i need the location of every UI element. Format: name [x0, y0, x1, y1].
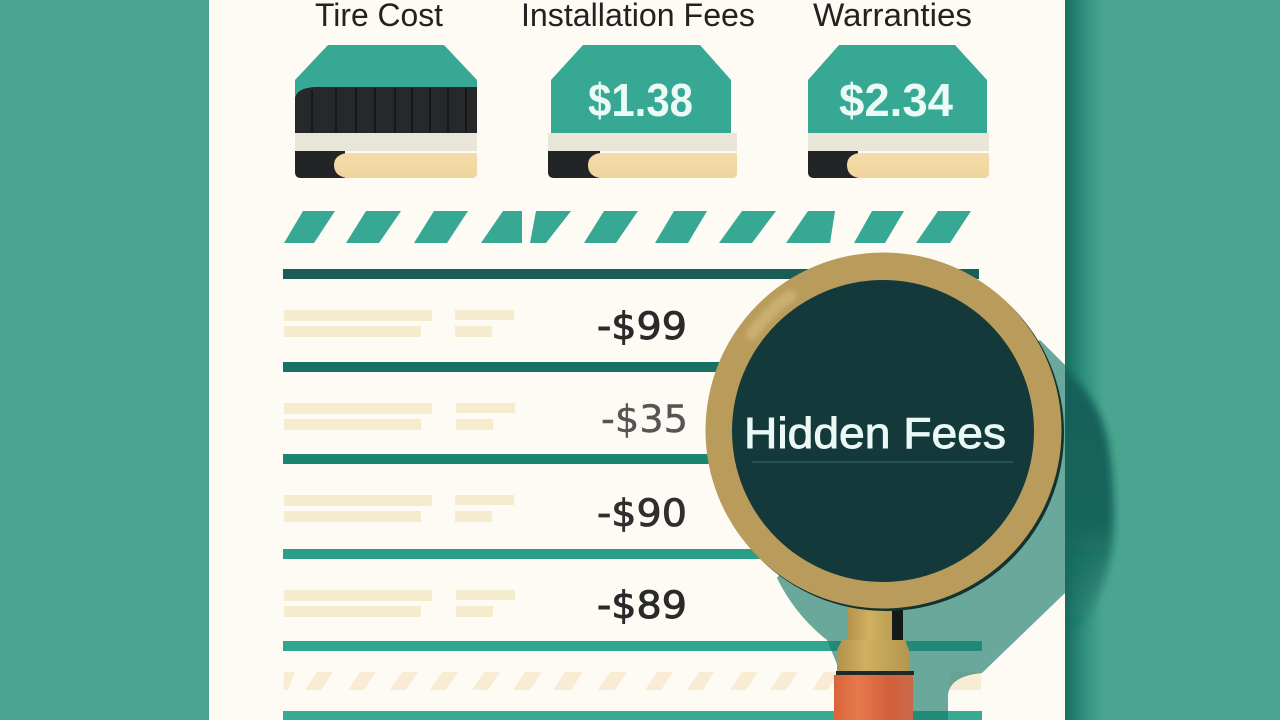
- lens glass: [732, 280, 1034, 582]
- lens rim: [708, 255, 1064, 611]
- handle: orange grip: [834, 675, 913, 720]
- row 4 placeholder text: [284, 590, 515, 617]
- label: Hidden Fees: Hidden Fees: [744, 409, 1006, 458]
- magnifier cast shadow: [777, 340, 1065, 720]
- table: fee rows: [283, 269, 982, 720]
- row 3 placeholder text: [284, 495, 514, 522]
- amount: -$90: -$90: [597, 492, 687, 535]
- icon: installation fees card: [548, 45, 737, 178]
- amount: -$89: -$89: [597, 584, 687, 627]
- icon: tire cost card: [295, 45, 477, 178]
- icon: warranties card: [808, 45, 989, 178]
- panel: receipt: [209, 0, 1065, 720]
- magnifying glass: [706, 252, 1064, 720]
- row 2 placeholder text: [284, 403, 515, 430]
- handle: gold collars: [836, 600, 914, 675]
- amount: -$35: -$35: [601, 398, 688, 441]
- price: $1.38: $1.38: [588, 74, 693, 126]
- price: $2.34: $2.34: [839, 74, 953, 126]
- panel shadow: [1065, 0, 1103, 720]
- row 1 placeholder text: [284, 310, 514, 337]
- teal stripe divider: [284, 211, 971, 243]
- infographic canvas: [209, 0, 1118, 720]
- magnifier shadow on background: [1065, 370, 1118, 622]
- amount: -$99: -$99: [597, 305, 687, 348]
- cream dash divider: [283, 672, 981, 690]
